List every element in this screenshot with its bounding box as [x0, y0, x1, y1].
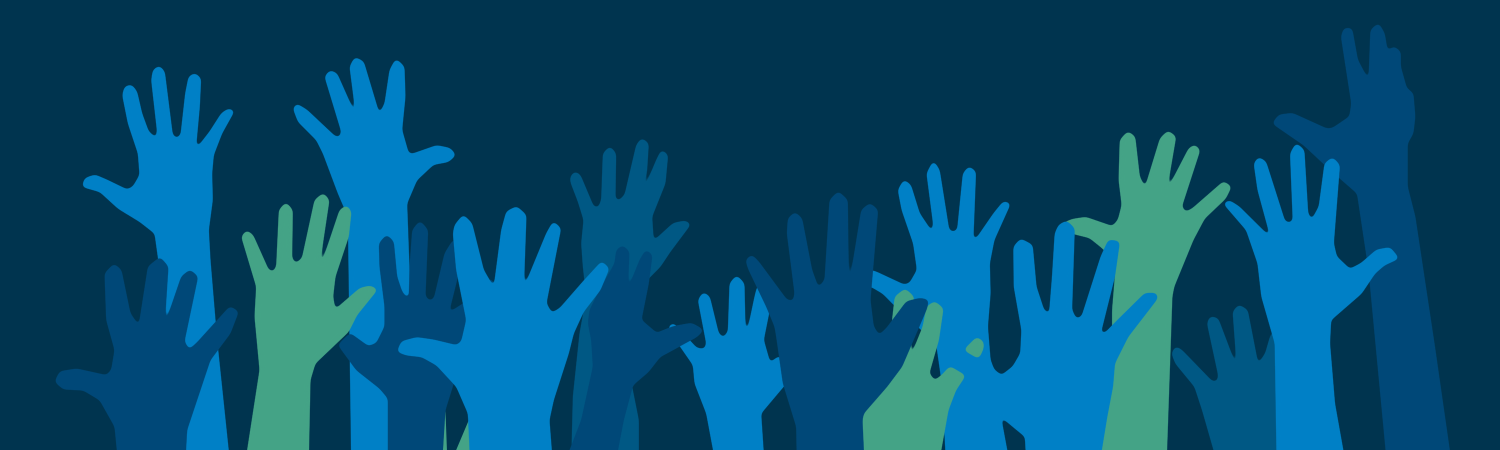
hand: small green behind centre — [363, 407, 473, 450]
hand: light blue top middle — [293, 57, 456, 450]
hand: dark blue far right — [1273, 23, 1451, 450]
hand: green left — [242, 193, 377, 450]
hand: dark blue centre — [565, 246, 703, 450]
hand: green lower centre — [862, 289, 965, 450]
hand: dark blue tall centre — [746, 192, 928, 450]
hand: dark blue centre thumb overlap — [657, 323, 703, 357]
hand: dark blue behind centre — [338, 221, 497, 450]
hand: light blue far right — [1224, 143, 1399, 450]
hand: large light blue centre — [397, 207, 609, 450]
hand: teal centre background — [571, 138, 691, 450]
hand: light blue top left — [82, 66, 234, 450]
hand: small light blue centre — [668, 276, 800, 450]
hand: green thumb tip — [964, 337, 983, 358]
hand: light blue right centre pair — [852, 161, 1157, 450]
hand: dark blue lower left — [55, 257, 238, 450]
hand: teal right background — [1172, 305, 1285, 450]
hand: green right — [1063, 131, 1231, 450]
